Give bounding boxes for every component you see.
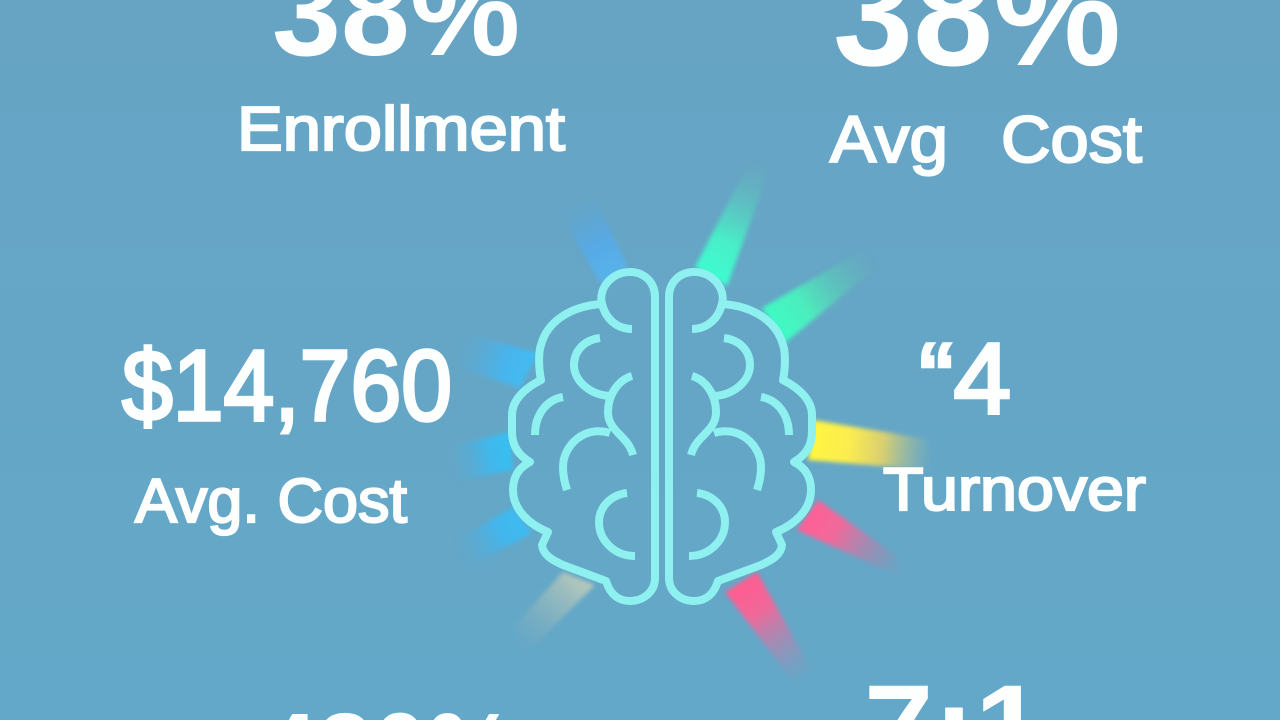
stat: average cost left — [122, 330, 452, 536]
turnover value: “4 — [919, 323, 1011, 435]
icon: brain — [512, 272, 812, 601]
top right label: Avg — [830, 102, 948, 176]
stat: average cost top right — [830, 0, 1142, 176]
stat: enrollment — [237, 0, 565, 164]
right hemisphere — [669, 272, 812, 601]
stat: turnover — [883, 323, 1146, 523]
turnover label: Turnover — [883, 456, 1146, 523]
top right label: Cost — [1001, 102, 1142, 176]
left hemisphere — [512, 272, 655, 601]
left label: Avg. Cost — [135, 467, 407, 536]
enrollment label: Enrollment — [237, 95, 565, 164]
left value: $14,760 — [122, 330, 452, 442]
rays around brain — [447, 160, 930, 687]
